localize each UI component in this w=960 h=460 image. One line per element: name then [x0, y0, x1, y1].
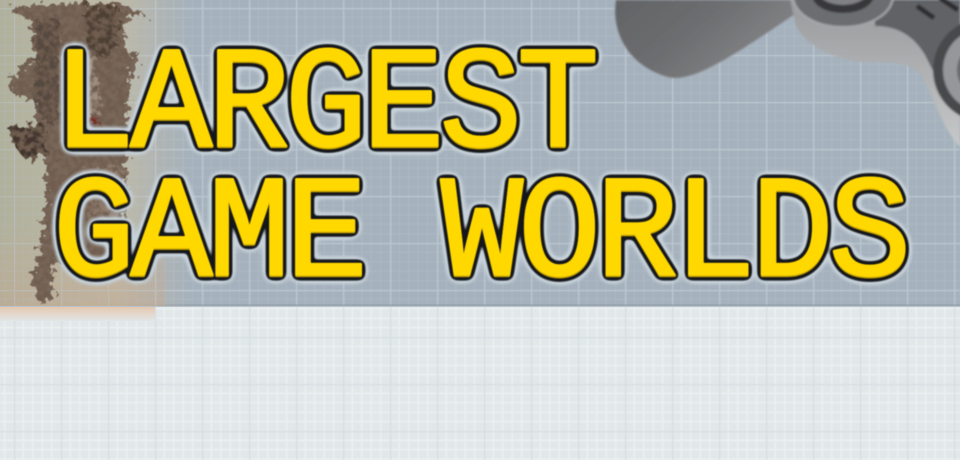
panel: lower pale grid area [0, 307, 960, 460]
controller centre buttons [917, 0, 958, 18]
controller body shell [790, 0, 960, 147]
controller left grip [615, 0, 795, 78]
controller left stick [793, 0, 893, 27]
controller right stick [933, 18, 960, 122]
panel: blue-grey header band [0, 0, 960, 307]
illustration: gnarled tree at left [10, 3, 146, 302]
title line 2: GAME WORLDS [53, 156, 911, 320]
illustration: game controller at top right [615, 0, 960, 147]
photo backdrop: parchment fade at left of header [0, 0, 190, 321]
title [53, 27, 911, 320]
controller dark faceplate [875, 0, 960, 115]
title line 1: LARGEST [53, 27, 599, 191]
